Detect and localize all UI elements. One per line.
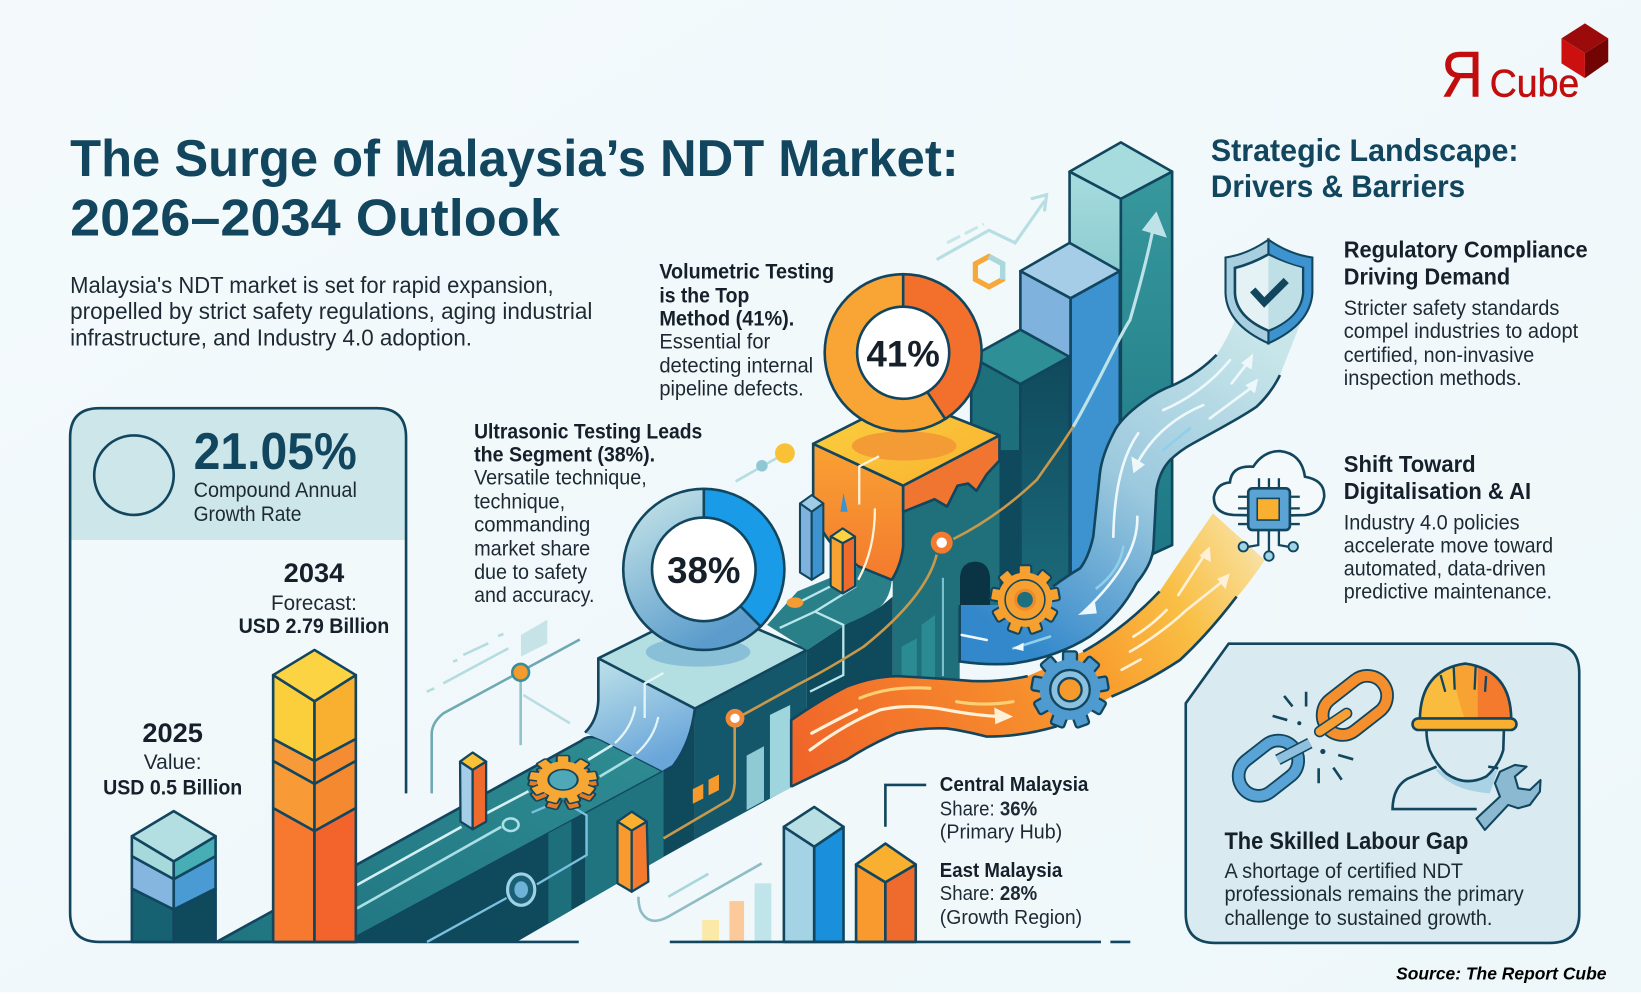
label: east malaysia: Share: 28%	[940, 883, 1037, 905]
labour gap body: A shortage of certified NDT	[1224, 860, 1463, 883]
small bar blue	[800, 495, 823, 580]
block two orange	[813, 398, 999, 580]
logo: RCube: Я	[1441, 38, 1483, 111]
labour gap body: challenge to sustained growth.	[1224, 907, 1492, 930]
label: east malaysia	[940, 860, 1082, 929]
label: central malaysia	[940, 774, 1089, 843]
icon: cloud chip	[1214, 451, 1324, 561]
body details	[693, 562, 990, 810]
label: central malaysia: (Primary Hub)	[940, 821, 1062, 843]
driver: digitalisation: automated, data-driven	[1344, 558, 1546, 581]
sketch lines: left of road	[427, 620, 580, 793]
heading: strategic landscape: Strategic Landscape:	[1211, 133, 1519, 168]
intro text: Malaysia's NDT market is set for rapid expansion,	[70, 272, 554, 298]
regional bar chart	[638, 785, 1130, 942]
driver: regulatory compliance: Driving Demand	[1344, 264, 1510, 290]
donut chart: 38%: 38%	[667, 550, 740, 591]
callout: ultrasonic testing: the Segment (38%).	[474, 444, 655, 467]
growth line with arrow	[664, 211, 1167, 838]
driver: regulatory compliance	[1344, 236, 1588, 390]
label: 2025: USD 0.5 Billion	[103, 776, 242, 799]
label: east malaysia: East Malaysia	[940, 860, 1063, 882]
labour gap heading: The Skilled Labour Gap	[1224, 828, 1468, 855]
logo: RCube	[1441, 23, 1608, 111]
icon: empty circle	[94, 435, 174, 515]
label: 2034: 2034	[284, 557, 344, 588]
driver: digitalisation: predictive maintenance.	[1344, 581, 1552, 604]
intro text	[70, 272, 592, 350]
title: 2026–2034 Outlook	[70, 190, 561, 248]
label: 2025: 2025	[142, 717, 203, 748]
callout: ultrasonic testing: Ultrasonic Testing Leads	[474, 421, 702, 444]
bar: 2025	[132, 811, 216, 942]
title: The Surge of Malaysia’s NDT Market:	[70, 130, 959, 188]
driver: digitalisation: Industry 4.0 policies	[1344, 512, 1520, 535]
labour gap body	[1224, 860, 1524, 930]
icon: gear on road	[528, 756, 598, 810]
isometric illustration: upper body	[650, 450, 1020, 864]
intro text: propelled by strict safety regulations, aging industrial	[70, 298, 592, 324]
driver: regulatory compliance: Stricter safety standards	[1344, 297, 1559, 320]
sketch arrow and hexagon	[937, 195, 1047, 287]
driver: digitalisation	[1344, 451, 1553, 604]
isometric illustration: tall bars	[971, 142, 1172, 638]
callout: ultrasonic testing: commanding	[474, 514, 590, 537]
callout: volumetric testing: Volumetric Testing	[659, 260, 834, 283]
blue stream	[960, 320, 1302, 664]
CAGR label line two: Growth Rate	[194, 503, 301, 526]
callout: volumetric testing: detecting internal	[659, 355, 813, 378]
label: 2034: USD 2.79 Billion	[239, 615, 389, 638]
panel: skilled labour gap	[1186, 644, 1579, 943]
callout: ultrasonic testing: market share	[474, 538, 590, 561]
small bar orange	[831, 528, 855, 593]
icon: worker with helmet	[1393, 664, 1541, 830]
label: 2025: Value:	[144, 751, 202, 774]
intro text: infrastructure, and Industry 4.0 adoption.	[70, 324, 472, 350]
logo: RCube: Cube	[1490, 63, 1579, 106]
callout: volumetric testing: is the Top	[659, 284, 749, 307]
road: lower surface	[217, 737, 664, 942]
icon: blue gear	[1031, 651, 1109, 728]
heading: strategic landscape	[1211, 133, 1519, 204]
block one with ramp	[585, 606, 807, 771]
label: central malaysia: Share: 36%	[940, 798, 1037, 820]
driver: regulatory compliance: certified, non-invasive	[1344, 344, 1534, 367]
node on ribbon path	[931, 532, 953, 554]
source note: Source: The Report Cube	[1396, 964, 1607, 984]
callout: ultrasonic testing	[474, 421, 702, 607]
label: east malaysia: (Growth Region)	[940, 907, 1082, 929]
label: 2034: Forecast:	[271, 592, 357, 615]
driver: regulatory compliance: inspection methods.	[1344, 367, 1522, 390]
donut chart: 38%	[623, 489, 784, 650]
icon: orange gear	[990, 565, 1060, 634]
decorative dots	[736, 443, 795, 481]
callout: ultrasonic testing: due to safety	[474, 561, 588, 584]
title	[70, 130, 959, 248]
label: 2025	[103, 717, 242, 799]
callout: ultrasonic testing: and accuracy.	[474, 584, 594, 607]
driver: digitalisation: Shift Toward	[1344, 451, 1476, 477]
panel: CAGR header	[70, 408, 406, 540]
callout: volumetric testing	[659, 260, 834, 401]
driver: regulatory compliance: Regulatory Compliance	[1344, 236, 1588, 262]
label: 2034	[239, 557, 389, 638]
node on lower path	[726, 709, 744, 728]
callout: ultrasonic testing: technique,	[474, 491, 565, 514]
label: central malaysia: Central Malaysia	[940, 774, 1089, 796]
orange ribbon	[791, 513, 1265, 787]
callout: volumetric testing: Method (41%).	[659, 308, 794, 331]
donut chart: 41%	[825, 274, 982, 431]
road: middle surface	[767, 566, 892, 692]
callout: volumetric testing: Essential for	[659, 331, 770, 354]
small bar front	[617, 812, 648, 892]
driver: digitalisation: Digitalisation & AI	[1344, 478, 1531, 504]
icon: broken chain	[1231, 668, 1395, 804]
icon: shield	[1226, 240, 1312, 343]
driver: regulatory compliance: compel industries to adopt	[1344, 320, 1578, 343]
CAGR value: 21.05%	[194, 423, 357, 481]
labour gap body: professionals remains the primary	[1224, 883, 1524, 906]
callout: volumetric testing: pipeline defects.	[659, 378, 804, 401]
small bar on road	[460, 753, 486, 829]
heading: strategic landscape: Drivers & Barriers	[1211, 169, 1465, 204]
callout: ultrasonic testing: Versatile technique,	[474, 467, 647, 490]
donut chart: 41%: 41%	[867, 333, 940, 374]
bar: 2034	[273, 650, 356, 942]
driver: digitalisation: accelerate move toward	[1344, 535, 1553, 558]
CAGR label: Compound Annual	[194, 479, 357, 502]
